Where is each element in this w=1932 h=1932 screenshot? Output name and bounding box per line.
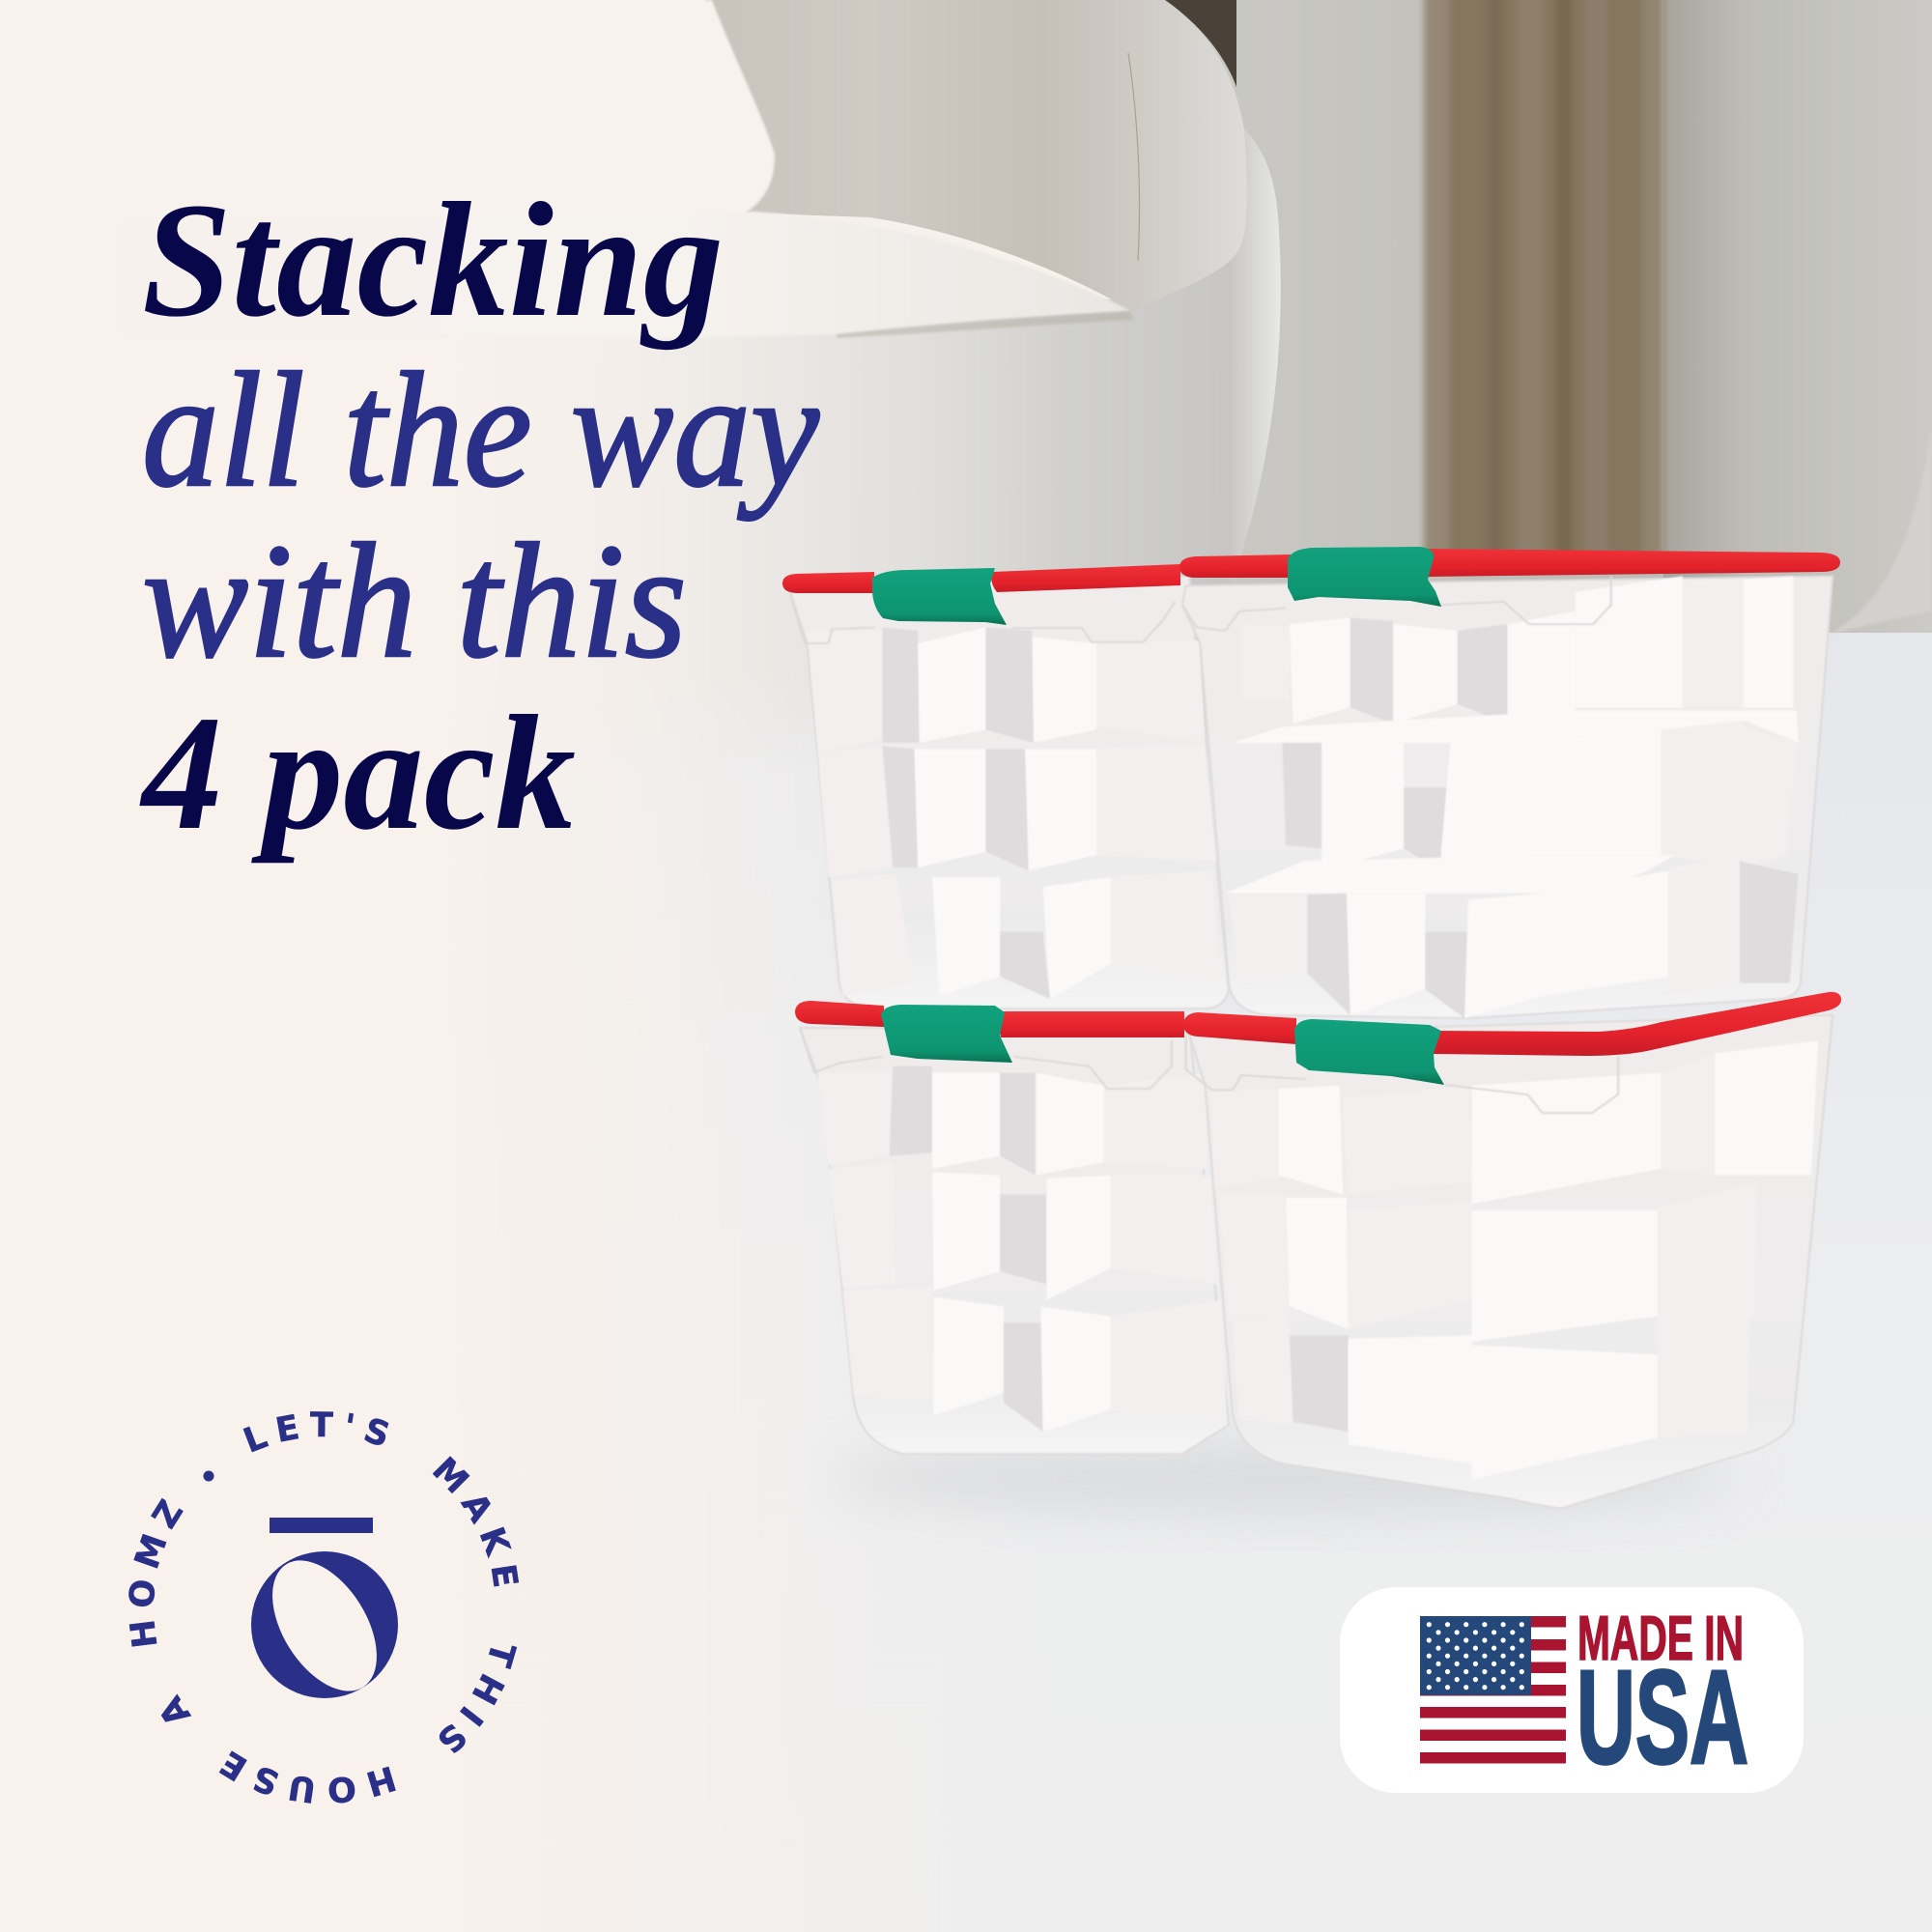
curtain [1424, 0, 1663, 560]
seat cushion [0, 212, 1130, 338]
usa text: USA [1577, 1643, 1748, 1792]
box: front left [795, 1001, 1229, 1454]
box: back left [782, 564, 1229, 1009]
product: four stacked storage boxes [782, 547, 1841, 1508]
box body and dividers [1186, 1015, 1833, 1508]
back wall [1159, 0, 1932, 657]
red lid [1183, 1012, 1296, 1044]
usa flag [1420, 1616, 1566, 1764]
sofa back cushion [705, 0, 1247, 311]
title line: 4 pack: 4 pack [139, 682, 576, 864]
floor shadow beneath boxes [831, 1441, 1739, 1515]
sheer curtain at right [1830, 425, 1932, 634]
box body and dividers [789, 576, 1229, 1009]
box: front right [1183, 992, 1841, 1508]
badge panel [1340, 1587, 1804, 1793]
green latch [881, 1005, 1012, 1063]
logo ring [251, 1543, 398, 1709]
green latch [872, 568, 1007, 625]
cushion shadow [837, 311, 1133, 338]
green latch [1294, 1019, 1444, 1085]
title [139, 169, 820, 864]
cushion seam [1128, 53, 1140, 261]
title line: all the way: all the way [142, 339, 820, 521]
made in text: MADE IN [1577, 1603, 1744, 1673]
right wall [1663, 0, 1932, 657]
made in usa badge [1340, 1587, 1804, 1793]
red lid [795, 1001, 884, 1027]
title line: Stacking: Stacking [142, 169, 724, 351]
circular slogan: LET'S MAKE THIS HOUSE A HOMZ [128, 1411, 520, 1804]
separator dot [203, 1470, 214, 1482]
logo bar [270, 1518, 373, 1533]
logo badge [128, 1411, 520, 1804]
throw pillow [0, 0, 775, 217]
red lid [782, 572, 874, 593]
sofa dark gap [1164, 0, 1236, 87]
box body and dividers [1182, 576, 1833, 1018]
box: back right [1179, 547, 1840, 1018]
floor [0, 633, 1932, 1932]
title line: with this: with this [142, 510, 687, 692]
sofa arm and base [0, 129, 1281, 763]
box body and dividers [800, 1028, 1229, 1454]
red lid [1179, 554, 1291, 578]
green latch [1288, 547, 1441, 607]
sofa base fading into floor [0, 676, 1256, 768]
